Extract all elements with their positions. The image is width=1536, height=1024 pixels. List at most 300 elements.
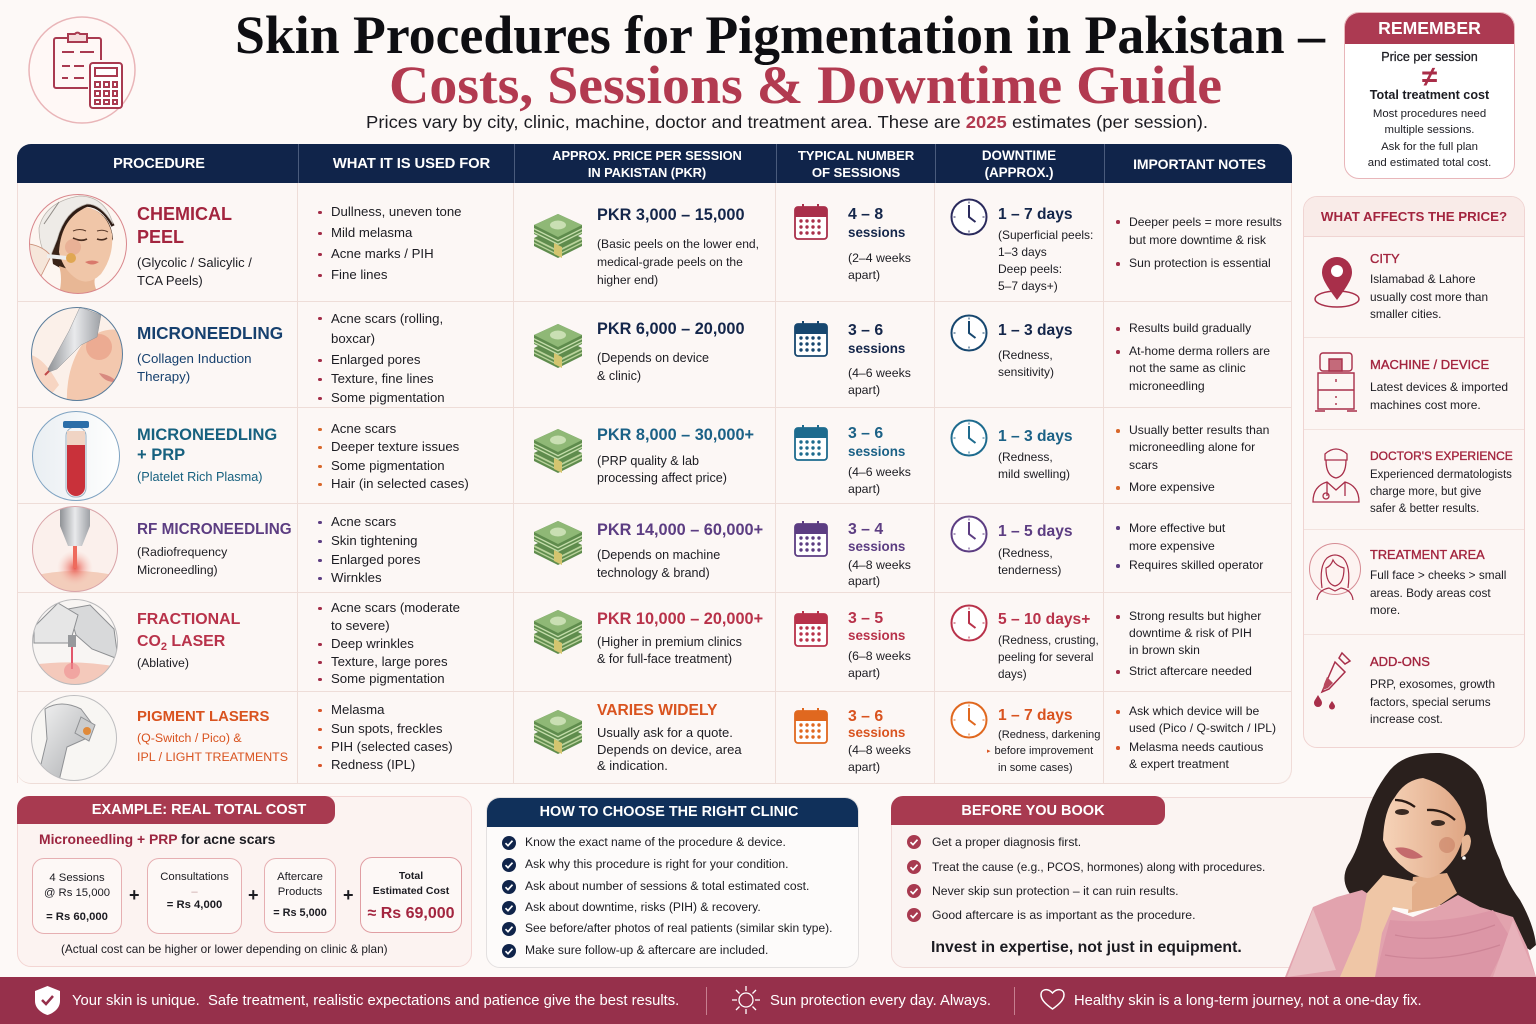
- subtitle: (Platelet Rich Plasma): [137, 470, 263, 484]
- header: used for: [299, 144, 515, 183]
- text: [1370, 567, 1506, 620]
- bullet: Deeper texture issues: [331, 439, 459, 454]
- note: & clinic): [597, 369, 641, 383]
- item: Ask about downtime, risks (PIH) & recovery.: [525, 900, 761, 914]
- bullet: but more downtime & risk: [1129, 232, 1266, 246]
- detail: [998, 450, 1070, 481]
- cell: notes: [1104, 504, 1292, 592]
- check: [502, 836, 516, 850]
- footnote: (Actual cost can be higher or lower depending on clinic & plan): [61, 942, 388, 956]
- note: (Depends on machine: [597, 548, 720, 562]
- icon: doctor: [1311, 444, 1361, 504]
- interval: (4–8 weeks: [848, 558, 911, 572]
- count: sessions: [848, 539, 905, 554]
- subtitle: TCA Peels): [137, 272, 203, 288]
- photo: pigment laser handpiece: [31, 695, 117, 781]
- cell: price: [514, 408, 776, 503]
- text: price vs total: ≠: [1422, 61, 1437, 92]
- subtitle: IPL / LIGHT TREATMENTS: [137, 750, 288, 764]
- count: sessions: [848, 224, 905, 240]
- subtitle: [137, 729, 288, 767]
- panel: what affects the price: [1303, 196, 1525, 748]
- note: (Higher in premium clinics: [597, 635, 742, 649]
- photo: microneedling pen: [31, 307, 123, 401]
- box: aftercare: Products: [278, 886, 322, 898]
- item: add-ons: [1304, 635, 1524, 747]
- box: aftercare: = Rs 5,000: [273, 907, 327, 919]
- cell: procedure: [17, 408, 298, 503]
- text: usually cost more than: [1370, 290, 1488, 304]
- subtitle: [137, 351, 252, 384]
- interval: [848, 366, 911, 397]
- label: TREATMENT AREA: [1370, 547, 1485, 562]
- header: sessions: [777, 144, 936, 183]
- count: 3 – 6: [848, 425, 883, 442]
- icon: calendar: [794, 521, 828, 557]
- interval: apart): [848, 574, 880, 588]
- cell: sessions: [776, 302, 935, 407]
- name: [137, 204, 232, 247]
- cell: procedure: [17, 593, 298, 691]
- cell: sessions: [776, 593, 935, 691]
- header: downtime: [936, 144, 1105, 183]
- subtitle: (Radiofrequency: [137, 545, 227, 559]
- cell: price: [514, 183, 776, 301]
- bullet: Melasma: [331, 702, 384, 717]
- bullet: Enlarged pores: [331, 552, 420, 567]
- icon: money: [533, 610, 583, 654]
- heading: [486, 797, 859, 827]
- bullet: More expensive: [1129, 480, 1215, 494]
- count: sessions: [848, 628, 905, 642]
- interval: [848, 558, 911, 588]
- cell: used for: [298, 408, 514, 503]
- heading: remember: [1344, 12, 1515, 44]
- cell: sessions: [776, 408, 935, 503]
- note: Depends on device, area: [597, 742, 742, 756]
- count: 3 – 6: [848, 708, 883, 725]
- detail: (Superficial peels:: [998, 228, 1093, 242]
- detail: (Redness, darkening: [998, 729, 1100, 741]
- bullet: Acne scars: [331, 514, 396, 529]
- box: sessions: @ Rs 15,000: [44, 887, 110, 899]
- photo: chemical peel: [29, 194, 127, 294]
- cell: used for: [298, 302, 514, 407]
- bullet: At-home derma rollers are: [1129, 344, 1270, 358]
- interval: [848, 648, 911, 682]
- interval: apart): [848, 760, 880, 774]
- text: reminder: [1368, 108, 1491, 169]
- table header: [17, 144, 1292, 183]
- cell: used for: [298, 183, 514, 301]
- detail: (Redness,: [998, 348, 1053, 362]
- text: reminder: Ask for the full plan: [1381, 141, 1478, 153]
- days: 5 – 10 days+: [998, 611, 1090, 628]
- bullet: Texture, fine lines: [331, 371, 434, 386]
- box: consultations: –: [191, 886, 198, 898]
- bullet: Dullness, uneven tone: [331, 204, 462, 219]
- bullet: microneedling alone for: [1129, 440, 1255, 454]
- text: Full face > cheeks > small: [1370, 568, 1506, 582]
- photo: laser hand: [32, 599, 118, 685]
- cell: downtime: [935, 183, 1104, 301]
- row: RF microneedling: [17, 504, 1292, 593]
- bullet: Deeper peels = more results: [1129, 214, 1282, 228]
- note: & indication.: [597, 758, 668, 773]
- bullet: Texture, large pores: [331, 654, 448, 669]
- count: sessions: [848, 725, 905, 740]
- interval: apart): [848, 666, 880, 680]
- bullet: more expensive: [1129, 538, 1215, 552]
- cell: procedure: [17, 302, 298, 407]
- cell: price: [514, 302, 776, 407]
- text: [1370, 467, 1512, 518]
- bullet: Sun spots, freckles: [331, 721, 442, 736]
- interval: apart): [848, 268, 880, 282]
- cell: procedure: [17, 504, 298, 592]
- cell: notes: [1104, 302, 1292, 407]
- cell: used for: [298, 593, 514, 691]
- heading: [1304, 197, 1524, 237]
- price: PKR 3,000 – 15,000: [597, 206, 745, 224]
- note: & for full-face treatment): [597, 652, 732, 666]
- text: Latest devices & imported: [1370, 380, 1508, 394]
- heading: HOW TO CHOOSE THE RIGHT CLINIC: [540, 804, 798, 820]
- item: machine: [1304, 338, 1524, 430]
- text: reminder: Most procedures need: [1373, 108, 1486, 120]
- bullet: to severe): [331, 618, 390, 633]
- heading: WHAT AFFECTS THE PRICE?: [1321, 209, 1507, 224]
- note: higher end): [597, 273, 658, 287]
- text: increase cost.: [1370, 712, 1443, 726]
- icon: shield check: [35, 986, 60, 1015]
- bullet: scars: [1129, 458, 1158, 472]
- icon: clock: [950, 604, 988, 642]
- note: [597, 548, 720, 580]
- cell: downtime: [935, 692, 1104, 783]
- name: CO2 LASER: [137, 632, 225, 653]
- text: price vs total: Price per session: [1381, 50, 1478, 64]
- label: DOCTOR'S EXPERIENCE: [1370, 449, 1513, 463]
- days: 1 – 7 days: [998, 707, 1073, 724]
- box: total: [360, 857, 462, 933]
- icon: location pin: [1313, 256, 1361, 310]
- check: [907, 884, 921, 898]
- cell: notes: [1104, 408, 1292, 503]
- bullet: Enlarged pores: [331, 352, 420, 367]
- detail: sensitivity): [998, 365, 1054, 379]
- header: procedure: PROCEDURE: [113, 156, 205, 172]
- interval: [848, 251, 911, 282]
- icon: money: [534, 214, 582, 258]
- row: microneedling: [17, 302, 1292, 408]
- price: PKR 8,000 – 30,000+: [597, 426, 754, 444]
- note: [597, 237, 759, 287]
- bullet: Some pigmentation: [331, 390, 445, 405]
- text: machines cost more.: [1370, 398, 1481, 412]
- header: notes: IMPORTANT NOTES: [1133, 156, 1266, 172]
- note: Usually ask for a quote.: [597, 725, 733, 740]
- count: [848, 611, 905, 644]
- icon: clock: [950, 198, 988, 236]
- text: areas. Body areas cost: [1370, 586, 1491, 600]
- row: chemical peel: [17, 183, 1292, 302]
- bullet: Acne scars (rolling,: [331, 311, 443, 326]
- bullet: [331, 599, 460, 635]
- box: total: Estimated Cost: [373, 885, 449, 897]
- subtitle: [137, 255, 252, 288]
- item: Get a proper diagnosis first.: [932, 835, 1081, 849]
- days: 1 – 7 days: [998, 206, 1073, 223]
- check: [907, 908, 921, 922]
- photo: RF device: [32, 506, 118, 592]
- bullet: Strong results but higher: [1129, 608, 1261, 622]
- bullet: & expert treatment: [1129, 756, 1229, 770]
- bullet: Skin tightening: [331, 533, 418, 548]
- interval: (4–6 weeks: [848, 465, 911, 479]
- text: price vs total: Total treatment cost: [1370, 88, 1489, 102]
- bullet: Wirnkles: [331, 570, 382, 585]
- bullet: downtime & risk of PIH: [1129, 626, 1252, 640]
- name: [137, 426, 277, 464]
- text: [1370, 271, 1488, 324]
- check: [502, 901, 516, 915]
- name: PEEL: [137, 227, 184, 247]
- check: [502, 880, 516, 894]
- check: [502, 858, 516, 872]
- subtitle: (Glycolic / Salicylic /: [137, 255, 252, 270]
- icon: calendar: [794, 707, 828, 744]
- detail: (Redness,: [998, 546, 1053, 560]
- text: Experienced dermatologists: [1370, 469, 1512, 481]
- detail: 1–3 days: [998, 244, 1047, 258]
- bullet: Mild melasma: [331, 225, 412, 240]
- interval: (2–4 weeks: [848, 251, 911, 265]
- box: total: ≈ Rs 69,000: [367, 905, 455, 922]
- plus: +: [129, 885, 140, 905]
- bullet: used (Pico / Q-switch / IPL): [1129, 720, 1276, 734]
- interval: [848, 742, 911, 776]
- item: Ask why this procedure is right for your condition.: [525, 857, 788, 871]
- text: [1370, 676, 1495, 728]
- header: sessions: TYPICAL NUMBER: [798, 148, 914, 163]
- bullet: Acne scars: [331, 421, 396, 436]
- note: (Basic peels on the lower end,: [597, 237, 759, 251]
- header: downtime: (APPROX.): [985, 165, 1053, 180]
- item: Treat the cause (e.g., PCOS, hormones) along with procedures.: [932, 860, 1265, 874]
- check: [502, 944, 516, 958]
- cell: downtime: [935, 302, 1104, 407]
- subtitle: Microneedling): [137, 562, 218, 576]
- note: (Depends on device: [597, 351, 709, 365]
- name: CHEMICAL: [137, 204, 232, 224]
- interval: (4–8 weeks: [848, 743, 911, 757]
- text: reminder: multiple sessions.: [1385, 124, 1474, 136]
- bullet: Acne scars (moderate: [331, 600, 460, 615]
- box: aftercare: Aftercare: [277, 871, 323, 883]
- price: PKR 10,000 – 20,000+: [597, 610, 763, 628]
- bullet: Some pigmentation: [331, 458, 445, 473]
- note: [597, 351, 709, 383]
- name: PIGMENT LASERS: [137, 709, 269, 725]
- icon: calendar: [794, 204, 828, 240]
- count: [848, 709, 905, 741]
- name: MICRONEEDLING: [137, 323, 283, 343]
- bullet: [1129, 212, 1282, 248]
- detail: in some cases): [998, 762, 1073, 774]
- note: [597, 454, 727, 485]
- subtitle: (Collagen Induction: [137, 351, 252, 366]
- item: Ask about number of sessions & total estimated cost.: [525, 879, 809, 893]
- price: PKR 6,000 – 20,000: [597, 320, 745, 338]
- bullet: boxcar): [331, 331, 375, 346]
- header: downtime: DOWNTIME: [982, 148, 1056, 163]
- cell: downtime: [935, 504, 1104, 592]
- cell: used for: [298, 504, 514, 592]
- plus: +: [248, 885, 259, 905]
- icon: money: [534, 324, 582, 368]
- text: reminder: and estimated total cost.: [1368, 157, 1491, 169]
- days: 1 – 5 days: [998, 523, 1073, 540]
- photo: test tube: [32, 411, 120, 501]
- bullet: Ask which device will be: [1129, 704, 1259, 718]
- icon: heart: [1040, 987, 1065, 1011]
- cell: price: [514, 593, 776, 691]
- count: sessions: [848, 444, 905, 458]
- subtitle: [137, 545, 228, 576]
- interval: apart): [848, 383, 880, 397]
- icon: calendar: [794, 321, 828, 357]
- box: sessions: = Rs 60,000: [46, 911, 108, 923]
- box: consultations: Consultations: [160, 871, 229, 883]
- icon: clock: [950, 314, 988, 352]
- days: 1 – 3 days: [998, 322, 1073, 339]
- detail: [998, 632, 1099, 683]
- detail: tenderness): [998, 563, 1061, 577]
- text: more.: [1370, 603, 1400, 617]
- row: microneedling + PRP: [17, 408, 1292, 504]
- bullet: Requires skilled operator: [1129, 558, 1263, 572]
- cell: notes: [1104, 593, 1292, 691]
- detail: ▸ before improvement: [987, 745, 1093, 757]
- text: PRP, exosomes, growth: [1370, 677, 1495, 691]
- header: price: IN PAKISTAN (PKR): [588, 165, 706, 180]
- text: sun protection: Sun protection every day. Always.: [770, 993, 991, 1009]
- heading: BEFORE YOU BOOK: [961, 803, 1105, 819]
- name: RF MICRONEEDLING: [137, 521, 292, 538]
- icon: sun: [731, 985, 761, 1015]
- cell: sessions: [776, 692, 935, 783]
- box: aftercare: [264, 858, 336, 933]
- interval: apart): [848, 482, 880, 496]
- detail: Deep peels:: [998, 262, 1062, 276]
- bullet: Acne marks / PIH: [331, 246, 434, 261]
- text: price vs total: [1370, 50, 1490, 102]
- text: healthy skin: Healthy skin is a long-term journey, not a one-day fix.: [1074, 993, 1422, 1009]
- text: Islamabad & Lahore: [1370, 272, 1476, 286]
- text: [1370, 379, 1508, 414]
- count: [848, 425, 905, 458]
- text: safer & better results.: [1370, 503, 1479, 515]
- panel: how to choose the right clinic: [486, 797, 859, 968]
- icon: clipboard and calculator: [28, 16, 136, 124]
- note: [597, 725, 742, 774]
- note: [597, 634, 742, 668]
- subtitle: Microneedling + PRP for acne scars: [39, 831, 275, 847]
- note: (PRP quality & lab: [597, 454, 699, 468]
- cell: downtime: [935, 408, 1104, 503]
- panel: example real total cost: [17, 796, 472, 967]
- name: [137, 611, 240, 653]
- title: Skin Procedures for Pigmentation in Pakistan –: [235, 5, 1326, 65]
- box: sessions: [32, 858, 122, 934]
- icon: money: [534, 521, 582, 565]
- detail: [998, 546, 1061, 577]
- item: treatment area: [1304, 530, 1524, 635]
- bullet: [331, 309, 443, 349]
- header: price: APPROX. PRICE PER SESSION: [552, 148, 742, 163]
- bullet: More effective but: [1129, 520, 1225, 534]
- item: city: [1304, 238, 1524, 338]
- bullet: Redness (IPL): [331, 757, 415, 772]
- label: MACHINE / DEVICE: [1370, 357, 1489, 372]
- note: technology & brand): [597, 566, 710, 580]
- heading: [891, 796, 1165, 825]
- icon: clock: [950, 701, 988, 739]
- bullet: Hair (in selected cases): [331, 476, 469, 491]
- count: [848, 521, 905, 554]
- bullet: in brown skin: [1129, 642, 1200, 656]
- title: [235, 5, 1326, 112]
- count: [848, 206, 905, 240]
- bullet: Some pigmentation: [331, 671, 445, 686]
- note: processing affect price): [597, 471, 727, 485]
- bullet: [1129, 738, 1263, 772]
- cell: sessions: [776, 504, 935, 592]
- bullet: microneedling: [1129, 378, 1205, 392]
- cell: notes: [1104, 183, 1292, 301]
- text: factors, special serums: [1370, 694, 1491, 708]
- subtitle: (Ablative): [137, 656, 189, 670]
- header: sessions: OF SESSIONS: [812, 165, 900, 180]
- bullet: [1129, 702, 1276, 736]
- subtitle: (Q-Switch / Pico) &: [137, 731, 242, 745]
- box: consultations: = Rs 4,000: [167, 899, 222, 911]
- bullet: PIH (selected cases): [331, 739, 453, 754]
- count: 3 – 5: [848, 610, 883, 627]
- bullet: Deep wrinkles: [331, 636, 414, 651]
- count: 3 – 6: [848, 322, 883, 339]
- check: [907, 860, 921, 874]
- box: sessions: 4 Sessions: [49, 872, 105, 884]
- heading: [17, 796, 335, 824]
- heading: remember: REMEMBER: [1378, 18, 1481, 38]
- days: 1 – 3 days: [998, 428, 1073, 445]
- count: [848, 322, 905, 356]
- note: medical-grade peels on the: [597, 255, 743, 269]
- detail: [998, 228, 1093, 292]
- cell: sessions: [776, 183, 935, 301]
- panel: remember: [1344, 12, 1515, 179]
- cell: notes: [1104, 692, 1292, 783]
- label: CITY: [1370, 251, 1400, 266]
- panel: before you book: [891, 797, 1391, 968]
- cell: price: [514, 692, 776, 783]
- row: pigment lasers: [17, 692, 1292, 784]
- header: used for: WHAT IT IS USED FOR: [333, 156, 490, 172]
- interval: (6–8 weeks: [848, 649, 911, 663]
- check: [502, 922, 516, 936]
